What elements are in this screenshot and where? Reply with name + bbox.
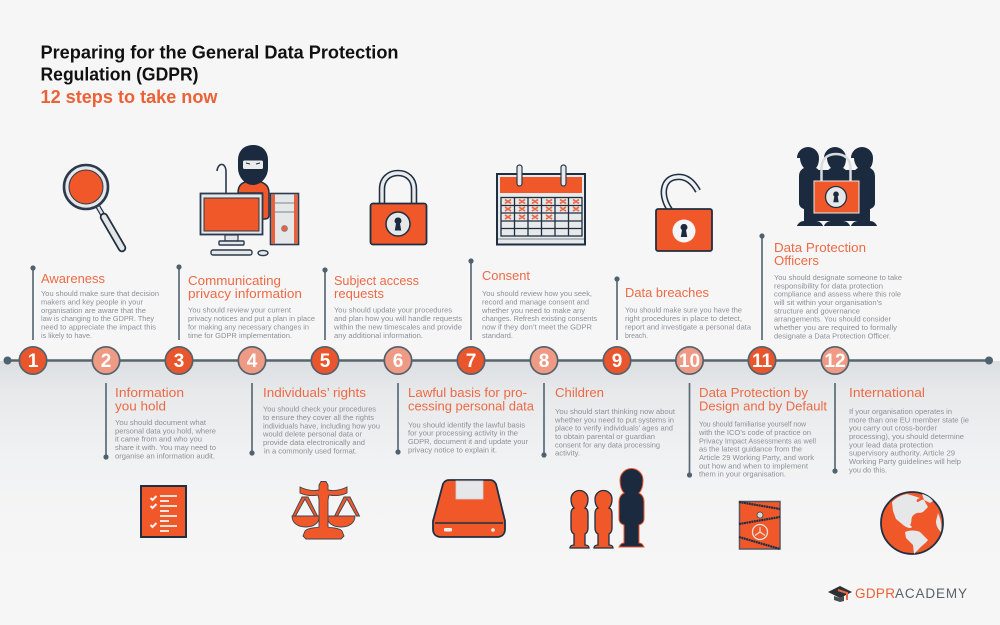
step number 10 [676, 347, 703, 374]
step number 9: 9 [612, 351, 622, 372]
panel: step 2 information you hold: Information [115, 385, 184, 400]
panel: step 1 awareness: is likely to have. [41, 331, 92, 340]
panel: step 9 data breaches: report and investigate a personal data [625, 322, 752, 332]
panel: step 2 information you hold: you hold [115, 398, 166, 414]
timeline [4, 347, 993, 374]
panel: step 6 lawful basis: for your processing activity in the [408, 429, 518, 438]
step number 12 [821, 347, 849, 374]
step number 11 [748, 347, 776, 374]
panel: step 7 consent: whether you need to make any [481, 306, 585, 315]
icon: data protection officers group [797, 147, 877, 226]
panel: step 12 international: you carry out cross-border [849, 424, 937, 433]
panel: step 9 data breaches: breach. [625, 331, 648, 340]
step number 5 [311, 347, 339, 374]
panel: step 1 awareness: You should make sure that decision [41, 289, 159, 298]
panel: step 1 awareness: need to appreciate the impact this [41, 322, 156, 332]
panel: step 6 lawful basis: privacy notice to explain it. [408, 445, 497, 454]
panel: step 11 data protection officers [759, 233, 902, 340]
panel: step 2 information you hold: organise an information audit. [115, 451, 215, 460]
panel: step 1 awareness: makers and key people in your [41, 298, 144, 306]
panel: step 5 subject access requests: You should update your procedures [334, 306, 452, 315]
panel: step 3 communicating privacy information: privacy information [188, 286, 302, 301]
step number 1: 1 [28, 351, 39, 372]
step number 9 [603, 347, 631, 374]
panel: step 7 consent: changes. Refresh existing consents [482, 314, 597, 323]
step number 7 [457, 347, 485, 374]
panel: step 7 consent: now if they don’t meet the GDPR [482, 322, 593, 332]
icon: globe [881, 492, 943, 554]
panel: step 6 lawful basis: Lawful basis for pro- [408, 385, 527, 400]
step number 3 [165, 347, 193, 374]
panel: step 10 data protection by design [687, 383, 827, 479]
panel: step 3 communicating privacy information: Communicating [188, 273, 281, 288]
panel: step 8 children: to obtain parental or guardian [555, 432, 655, 441]
step number 8: 8 [539, 351, 549, 372]
panel: step 10 data protection by design: out how and when to implement [699, 461, 809, 470]
panel: step 9 data breaches: right procedures in place to detect, [625, 314, 742, 323]
panel: step 8 children: You should start thinking now about [555, 407, 676, 416]
panel: step 11 data protection officers: designate a Data Protection Officer. [774, 331, 891, 340]
panel: step 10 data protection by design: You should familiarise yourself now [699, 420, 807, 429]
icon: hard drive [433, 480, 505, 537]
panel: step 7 consent [468, 258, 597, 340]
step number 3: 3 [174, 351, 184, 372]
step number 6 [384, 347, 412, 374]
step number 2: 2 [101, 351, 111, 372]
panel: step 12 international: your lead data protection [849, 440, 933, 449]
logo: GDPR Academy: ACADEMY [895, 586, 967, 601]
panel: step 1 awareness: law is changing to the GDPR. They [41, 314, 154, 323]
panel: step 10 data protection by design: Article 29 Working Party, and work [699, 453, 814, 462]
panel: step 3 communicating privacy information: for making any necessary changes in [188, 322, 309, 332]
step number 12: 12 [824, 351, 846, 372]
step number 7: 7 [466, 351, 476, 372]
panel: step 4 individuals rights: You should check your procedures [263, 405, 376, 414]
step number 2 [92, 347, 120, 374]
step number 10: 10 [679, 351, 700, 372]
panel: step 11 data protection officers: will sit within your organisation’s [773, 298, 882, 307]
panel: step 5 subject access requests: Subject access [334, 273, 419, 288]
panel: step 4 individuals rights: in a commonly used format. [264, 446, 357, 455]
panel: step 12 international: processing), you should determine [849, 432, 964, 441]
panel: step 10 data protection by design: as the latest guidance from the [699, 445, 802, 454]
panel: step 5 subject access requests: requests [334, 286, 384, 301]
panel: step 8 children: whether you need to put systems in [554, 415, 674, 424]
panel: step 2 information you hold: You should document what [115, 418, 207, 427]
panel: step 3 communicating privacy information [176, 264, 315, 340]
panel: step 10 data protection by design: Data Protection by [699, 385, 809, 400]
panel: step 5 subject access requests: and plan how you will handle requests [334, 314, 462, 323]
panel: step 2 information you hold [103, 383, 216, 460]
panel: step 8 children: place to verify individuals’ ages and [555, 424, 673, 433]
panel: step 7 consent: Consent [482, 268, 530, 283]
panel: step 7 consent: standard. [482, 331, 513, 340]
panel: step 6 lawful basis: GDPR, document it and update your [408, 437, 528, 446]
step number 4: 4 [247, 351, 258, 372]
panel: step 4 individuals rights: would delete personal data or [262, 430, 363, 439]
panel: step 1 awareness: Awareness [41, 271, 105, 286]
panel: step 7 consent: record and manage consent and [482, 298, 589, 306]
icon: padlock closed [370, 173, 426, 244]
panel: step 11 data protection officers: You should designate someone to take [774, 273, 902, 282]
panel: step 5 subject access requests [322, 267, 462, 340]
panel: step 10 data protection by design: Privacy Impact Assessments as well [699, 436, 816, 445]
panel: step 11 data protection officers: Data Protection [774, 240, 866, 255]
icon: scales of justice [292, 482, 360, 539]
panel: step 11 data protection officers: arrangements. You should consider [774, 315, 891, 324]
panel: step 6 lawful basis: cessing personal data [408, 398, 535, 414]
title: 12 steps to take now [40, 87, 218, 107]
panel: step 8 children: Children [555, 385, 604, 400]
icon: hacker at computer [200, 145, 298, 256]
panel: step 4 individuals rights [249, 383, 380, 456]
title [40, 42, 398, 107]
panel: step 10 data protection by design: with the ICO’s code of practice on [698, 428, 811, 437]
panel: step 11 data protection officers: responsibility for data protection [774, 281, 883, 290]
icon: padlock open [656, 177, 712, 251]
panel: step 6 lawful basis [395, 383, 535, 455]
panel: step 9 data breaches: You should make sure you have the [625, 306, 742, 315]
panel: step 2 information you hold: personal data you hold, where [115, 426, 216, 435]
panel: step 7 consent: You should review how you seek, [482, 289, 592, 298]
panel: step 1 awareness [30, 265, 159, 340]
panel: step 3 communicating privacy information: time for GDPR implementation. [188, 331, 292, 340]
panel: step 12 international: If your organisation operates in [849, 407, 952, 416]
panel: step 3 communicating privacy information: privacy notices and put a plan in place [188, 314, 315, 323]
panel: step 4 individuals rights: Individuals’ rights [263, 385, 367, 400]
icon: checklist [141, 486, 186, 537]
icon: children and adult [570, 469, 644, 548]
panel: step 4 individuals rights: to ensure they cover all the rights [263, 413, 374, 422]
step number 6: 6 [393, 351, 403, 372]
panel: step 11 data protection officers: structure and governance [774, 306, 860, 315]
icon: magnifying glass [64, 165, 122, 248]
step number 8 [530, 347, 558, 374]
step number 5: 5 [320, 351, 331, 372]
title: Preparing for the General Data Protection [40, 42, 398, 62]
panel: step 12 international: more than one EU member state (ie [849, 415, 969, 424]
panel: step 6 lawful basis: You should identify the lawful basis [408, 420, 525, 429]
panel: step 12 international: you do this. [849, 465, 887, 474]
title: Regulation (GDPR) [40, 64, 198, 84]
step number 1 [19, 347, 47, 374]
panel: step 9 data breaches: Data breaches [625, 285, 709, 300]
panel: step 3 communicating privacy information: You should review your current [188, 306, 292, 315]
panel: step 12 international: Working Party guidelines will help [849, 457, 961, 466]
panel: step 1 awareness: organisation are aware that the [41, 306, 146, 315]
panel: step 10 data protection by design: Design and by Default [699, 398, 827, 414]
step number 4 [238, 347, 266, 374]
step number 11: 11 [752, 351, 772, 372]
panel: step 11 data protection officers: Officers [774, 253, 819, 268]
panel: step 5 subject access requests: any additional information. [334, 331, 423, 340]
icon: chained safe [739, 502, 780, 549]
panel: step 8 children [541, 383, 676, 458]
panel: step 8 children: activity. [555, 449, 580, 458]
panel: step 2 information you hold: it came from and who you [115, 435, 202, 444]
panel: step 11 data protection officers: compliance and assess where this role [774, 290, 901, 299]
panel: step 8 children: consent for any data processing [555, 440, 660, 449]
panel: step 12 international: supervisory authority. Article 29 [849, 449, 955, 458]
panel: step 10 data protection by design: them in your organisation. [699, 470, 786, 479]
panel: step 12 international [832, 383, 969, 474]
logo: GDPR Academy [828, 586, 967, 602]
panel: step 9 data breaches [614, 276, 752, 340]
panel: step 12 international: International [849, 385, 925, 400]
panel: step 11 data protection officers: whether you are required to formally [773, 323, 897, 332]
panel: step 5 subject access requests: within the new timescales and provide [333, 322, 462, 332]
panel: step 2 information you hold: share it with. You may need to [115, 443, 216, 452]
panel: step 4 individuals rights: provide data electronically and [263, 438, 365, 447]
icon: calendar [497, 165, 585, 244]
logo: GDPR Academy: GDPR [855, 586, 895, 601]
panel: step 4 individuals rights: individuals have, including how you [263, 421, 380, 430]
